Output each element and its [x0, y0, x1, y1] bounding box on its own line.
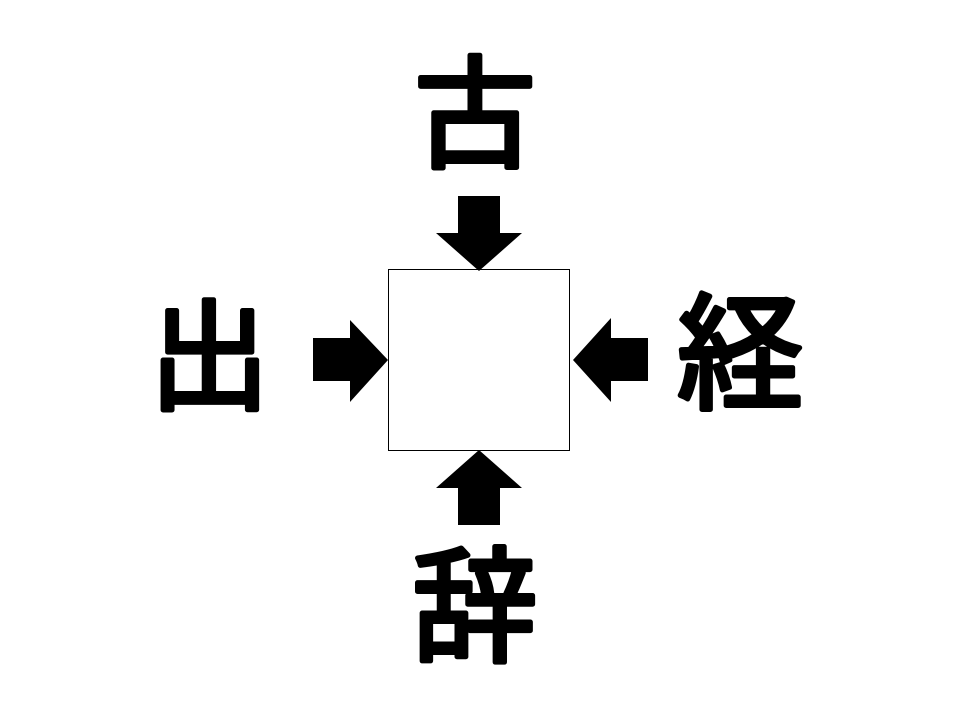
arrow: left pointing right — [313, 320, 388, 402]
arrow: right pointing left — [573, 318, 648, 402]
center empty box — [388, 270, 570, 450]
kanji right: 経: 経 — [677, 285, 803, 426]
arrow: top pointing down — [436, 196, 522, 271]
kanji left: 出: 出 — [150, 292, 270, 426]
kanji top: 古: 古 — [414, 48, 536, 184]
arrow: bottom pointing up — [436, 450, 522, 525]
kanji bottom: 辞: 辞 — [412, 540, 538, 679]
